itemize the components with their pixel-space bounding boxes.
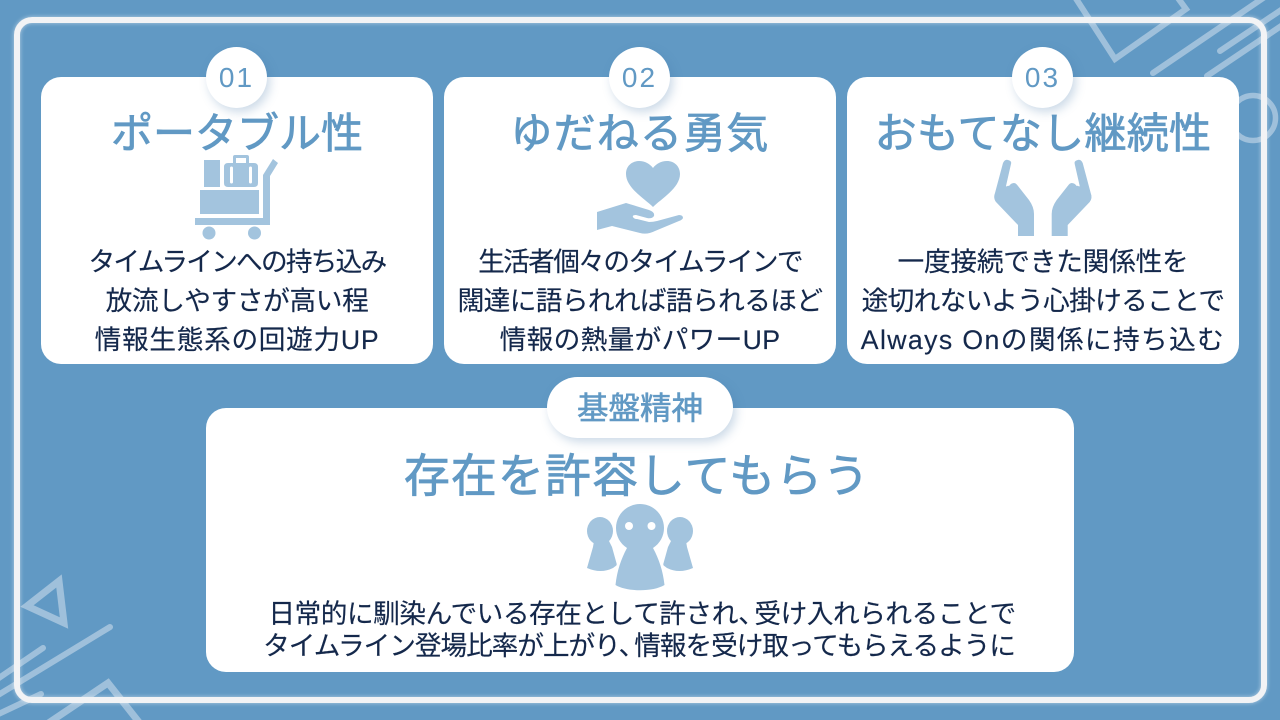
icon: heart on hand bbox=[597, 161, 683, 234]
text: card 2 body: 闊達に語られれば語られるほど bbox=[458, 286, 822, 316]
text: card 1 body bbox=[88, 247, 386, 355]
badge: 基盤精神: 基盤精神 bbox=[577, 390, 703, 426]
icon: three people bbox=[587, 504, 693, 590]
text: foundation body: 日常的に馴染んでいる存在として許され、受け入れられることで bbox=[268, 599, 1016, 629]
heading: ゆだねる勇気: ゆだねる勇気 bbox=[510, 110, 770, 157]
badge: 03: 03 bbox=[1025, 62, 1060, 93]
badge: 02: 02 bbox=[622, 62, 657, 93]
heading: ポータブル性: ポータブル性 bbox=[111, 110, 363, 157]
text: card 2 body: 生活者個々のタイムラインで bbox=[478, 247, 802, 277]
text: foundation body bbox=[263, 599, 1016, 661]
text: card 3 body: Always Onの関係に持ち込む bbox=[861, 325, 1225, 355]
text: card 3 body: 一度接続できた関係性を bbox=[897, 247, 1189, 277]
heading: 存在を許容してもらう: 存在を許容してもらう bbox=[404, 450, 870, 502]
text: foundation body: タイムライン登場比率が上がり、情報を受け取ってもらえるように bbox=[263, 631, 1015, 661]
panel: ゆだねる勇気 bbox=[444, 77, 836, 364]
text: card 1 body: 情報生態系の回遊力UP bbox=[95, 325, 379, 355]
icon: open hands bbox=[994, 160, 1092, 236]
text: card 3 body: 途切れないよう心掛けることで bbox=[862, 286, 1224, 316]
panel: ポータブル性 bbox=[41, 77, 433, 364]
panel: おもてなし継続性 bbox=[847, 77, 1239, 364]
heading: おもてなし継続性: おもてなし継続性 bbox=[875, 110, 1211, 157]
badge: 02 bbox=[609, 47, 670, 108]
badge: 基盤精神 bbox=[547, 377, 733, 438]
panel: 存在を許容してもらう bbox=[206, 408, 1074, 672]
badge: 01: 01 bbox=[219, 62, 254, 93]
text: card 3 body bbox=[860, 247, 1225, 355]
text: card 2 body bbox=[458, 247, 822, 355]
badge: 03 bbox=[1012, 47, 1073, 108]
icon: luggage cart bbox=[195, 155, 278, 240]
badge: 01 bbox=[206, 47, 267, 108]
text: card 2 body: 情報の熱量がパワーUP bbox=[500, 325, 780, 355]
text: card 1 body: タイムラインへの持ち込み bbox=[88, 247, 386, 277]
text: card 1 body: 放流しやすさが高い程 bbox=[106, 286, 368, 316]
